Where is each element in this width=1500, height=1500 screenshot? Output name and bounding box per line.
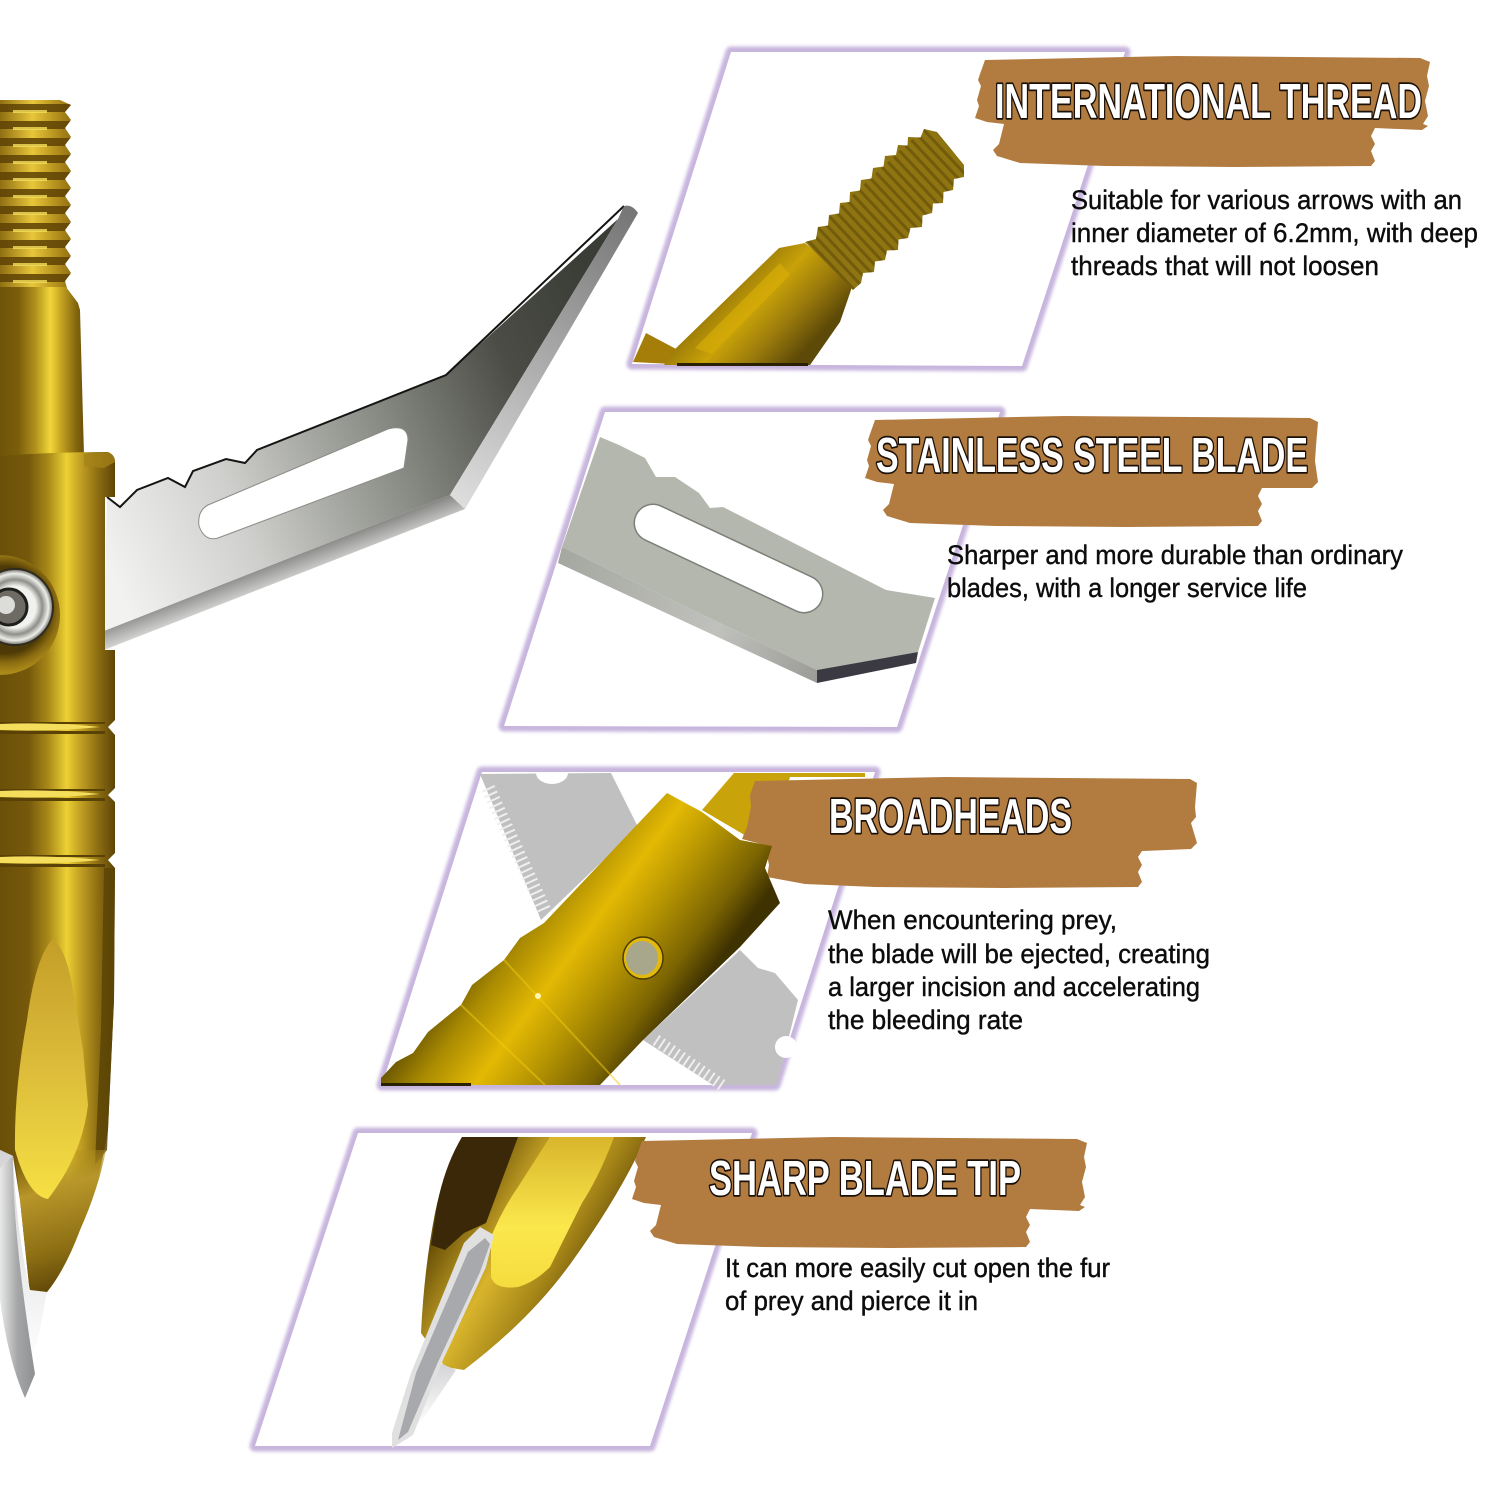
description: the blade will be ejected, creating: [828, 939, 1210, 969]
description: a larger incision and accelerating: [828, 972, 1200, 1002]
panel: stainless steel blade: [504, 412, 1403, 727]
panel: sharp blade tip: [255, 1133, 1110, 1448]
panel: international thread: [632, 52, 1478, 366]
paint banner: [865, 416, 1318, 527]
shaft stem: [702, 773, 865, 850]
description: threads that will not loosen: [1071, 251, 1379, 281]
grooves: [0, 722, 105, 867]
description: inner diameter of 6.2mm, with deep: [1071, 218, 1478, 248]
description: [828, 905, 1210, 1035]
paint banner: [975, 56, 1430, 167]
heading: BROADHEADS: [829, 790, 1072, 844]
description: the bleeding rate: [828, 1005, 1023, 1035]
gold body close-up: [381, 793, 780, 1086]
blade close-up: [558, 437, 935, 683]
description: [725, 1253, 1110, 1316]
panel frame: [255, 1133, 752, 1446]
description: blades, with a longer service life: [947, 573, 1307, 603]
threaded tip close-up: [633, 129, 964, 366]
description: When encountering prey,: [828, 905, 1117, 935]
tip close-up: [392, 1137, 646, 1448]
panel frame: [504, 412, 1000, 727]
description: [1071, 185, 1478, 281]
ogive tip: [14, 1150, 106, 1294]
heading: STAINLESS STEEL BLADE: [876, 429, 1308, 483]
description: Suitable for various arrows with an: [1071, 185, 1462, 215]
panel: broadheads: [381, 772, 1210, 1086]
heading: SHARP BLADE TIP: [709, 1152, 1021, 1206]
screw: [0, 555, 60, 675]
paint banner: [742, 777, 1197, 888]
gold body: [0, 452, 115, 1294]
threaded tip: [0, 100, 71, 290]
crossing blades: [480, 773, 798, 1085]
description: It can more easily cut open the fur: [725, 1253, 1110, 1283]
lower blade tip: [0, 1150, 47, 1398]
main broadhead product: [0, 100, 638, 1398]
pin: [623, 937, 663, 979]
panel frame: [382, 772, 875, 1085]
paint banner: [632, 1137, 1087, 1248]
flame cutout: [15, 939, 88, 1199]
description: [947, 540, 1403, 603]
panel frame: [632, 52, 1125, 366]
description: Sharper and more durable than ordinary: [947, 540, 1403, 570]
shaft: [0, 287, 84, 456]
side shade: [95, 868, 115, 1165]
large steel blade: [104, 206, 638, 650]
description: of prey and pierce it in: [725, 1286, 978, 1316]
